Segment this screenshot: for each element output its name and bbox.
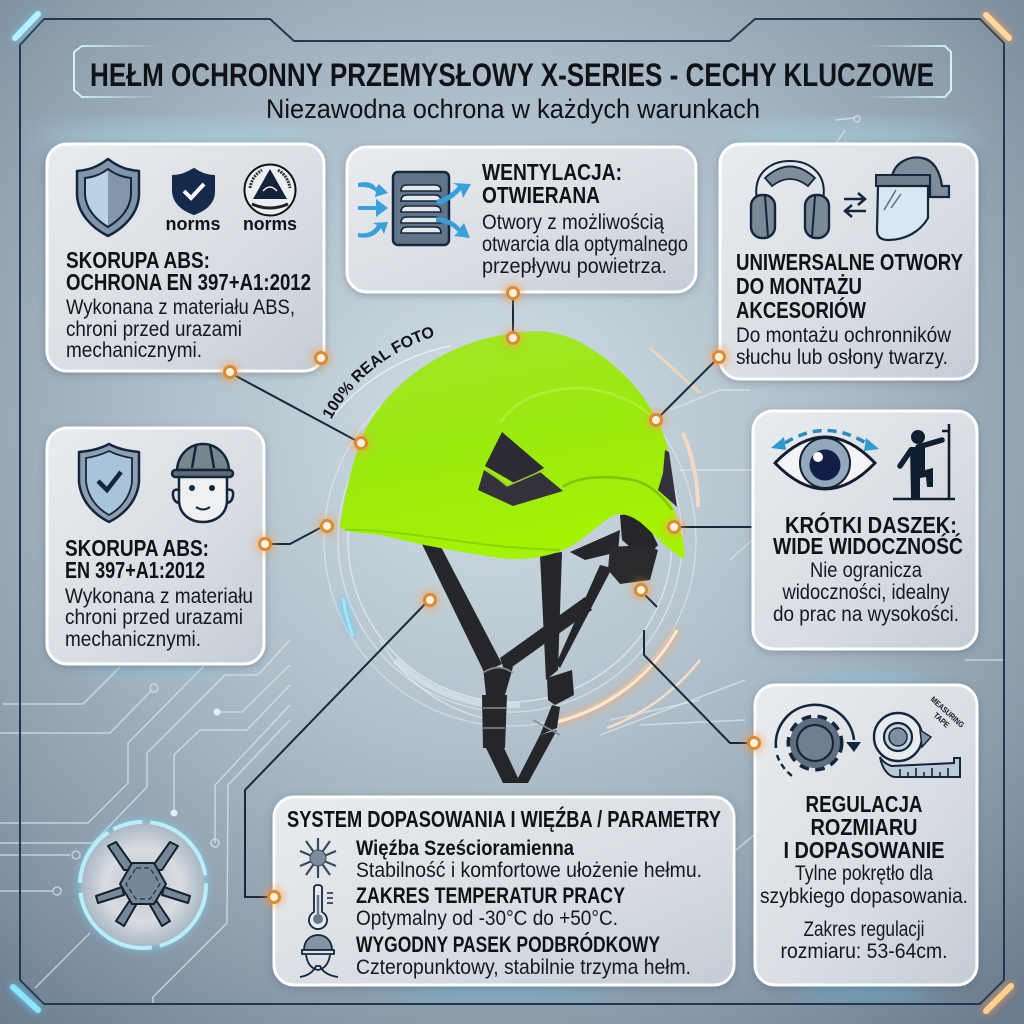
heading: I DOPASOWANIE <box>784 837 944 863</box>
body text: przepływu powietrza. <box>482 255 667 278</box>
icon: worker face <box>172 444 233 522</box>
icon: thermometer <box>309 885 333 929</box>
icon: harness orb <box>77 819 209 951</box>
panel: short visor <box>753 411 977 649</box>
label: norms: norms <box>166 214 220 234</box>
icon: chin strap <box>300 935 338 977</box>
body text <box>66 296 295 362</box>
temperature text <box>356 883 625 930</box>
label: measuring tape: TAPE <box>932 711 951 730</box>
body text: Tylne pokrętło dla <box>795 862 933 885</box>
body text: do prac na wysokości. <box>773 603 959 626</box>
suspension text: Stabilność i komfortowe ułożenie hełmu. <box>356 859 702 882</box>
panel: accessory mounts <box>720 144 977 379</box>
body text: chroni przed urazami <box>66 318 242 341</box>
icon: six-arm suspension <box>300 838 336 878</box>
icon: norms shield <box>173 169 214 214</box>
suspension text: Więźba Sześcioramienna <box>356 837 574 860</box>
body text: rozmiaru: 53-64cm. <box>780 940 948 963</box>
body text: otwarcia dla optymalnego <box>482 233 688 256</box>
label: norms: norms <box>243 214 297 234</box>
icon: dial <box>776 705 861 776</box>
body text <box>482 211 688 278</box>
heading: SYSTEM DOPASOWANIA I WIĘŹBA / PARAMETRY <box>287 805 721 832</box>
heading <box>736 249 963 323</box>
HUD rings behind helmet <box>324 346 700 728</box>
heading: SKORUPA ABS: <box>66 247 210 273</box>
body text <box>736 324 952 369</box>
panel: fit system and parameters <box>274 797 734 985</box>
body text: słuchu lub osłony twarzy. <box>736 346 948 369</box>
body text: widoczności, idealny <box>782 581 950 604</box>
heading: DO MONTAŻU <box>736 273 862 299</box>
body text: Zakres regulacji <box>804 918 924 941</box>
body text: Wykonana z materiału ABS, <box>66 296 295 319</box>
heading: SKORUPA ABS: <box>65 535 209 561</box>
temperature text: ZAKRES TEMPERATUR PRACY <box>356 883 625 908</box>
heading: EN 397+A1:2012 <box>65 557 205 583</box>
suspension text <box>356 837 702 882</box>
heading <box>773 511 963 559</box>
icon: shield <box>77 159 139 236</box>
heading <box>66 247 311 295</box>
icon: eye <box>771 430 879 489</box>
heading: WENTYLACJA: <box>482 159 622 185</box>
heading: OCHRONA EN 397+A1:2012 <box>66 269 311 295</box>
icon: swap arrows <box>844 193 866 217</box>
body text: mechanicznymi. <box>65 628 201 651</box>
heading: WIDE WIDOCZNOŚĆ <box>773 532 963 559</box>
body text: szybkiego dopasowania. <box>760 885 968 908</box>
label: 100% real foto: 100% REAL FOTO <box>323 327 434 419</box>
title <box>74 46 951 97</box>
body text <box>760 862 968 963</box>
body text: chroni przed urazami <box>65 606 243 629</box>
body text: Wykonana z materiału <box>65 585 253 608</box>
body text: Do montażu ochronników <box>736 324 952 347</box>
straps <box>420 513 658 783</box>
chin strap text: Czteropunktowy, stabilnie trzyma hełm. <box>356 956 691 979</box>
body text <box>65 585 253 651</box>
chin strap text: WYGODNY PASEK PODBRÓDKOWY <box>356 932 660 957</box>
heading: ROZMIARU <box>810 814 918 840</box>
shell <box>340 331 684 559</box>
temperature text: Optymalny od -30°C do +50°C. <box>356 907 618 930</box>
callout markers <box>220 283 764 907</box>
icon: measuring tape <box>874 713 960 777</box>
heading: AKCESORIÓW <box>736 296 867 323</box>
heading: OTWIERANA <box>482 182 600 208</box>
callout lines <box>236 300 752 897</box>
body text: Otwory z możliwością <box>482 211 664 234</box>
body text: mechanicznymi. <box>66 339 202 362</box>
panel: ABS shell top <box>47 144 324 371</box>
body text: Nie ogranicza <box>810 559 922 582</box>
panel: ventilation <box>347 147 696 292</box>
heading: UNIWERSALNE OTWORY <box>736 249 963 275</box>
label: measuring tape: MEASURING <box>929 695 966 730</box>
icon: face shield <box>876 158 949 240</box>
icon: check shield <box>79 444 139 522</box>
heading <box>65 535 209 583</box>
helmet vents <box>485 432 544 484</box>
icon: certification seal <box>244 164 296 216</box>
heading: KRÓTKI DASZEK: <box>785 511 957 538</box>
body text <box>773 559 959 626</box>
panel: size adjustment <box>755 685 977 985</box>
chin strap text <box>356 932 691 979</box>
helmet <box>340 331 684 783</box>
icon: climbing worker <box>893 424 955 499</box>
subtitle: Niezawodna ochrona w każdych warunkach <box>266 94 760 124</box>
icon: earmuffs <box>751 161 829 238</box>
heading <box>482 159 622 208</box>
heading: REGULACJA <box>806 791 923 817</box>
icon: vent <box>358 172 471 245</box>
panel: ABS shell lower <box>47 428 264 664</box>
heading <box>784 791 944 863</box>
